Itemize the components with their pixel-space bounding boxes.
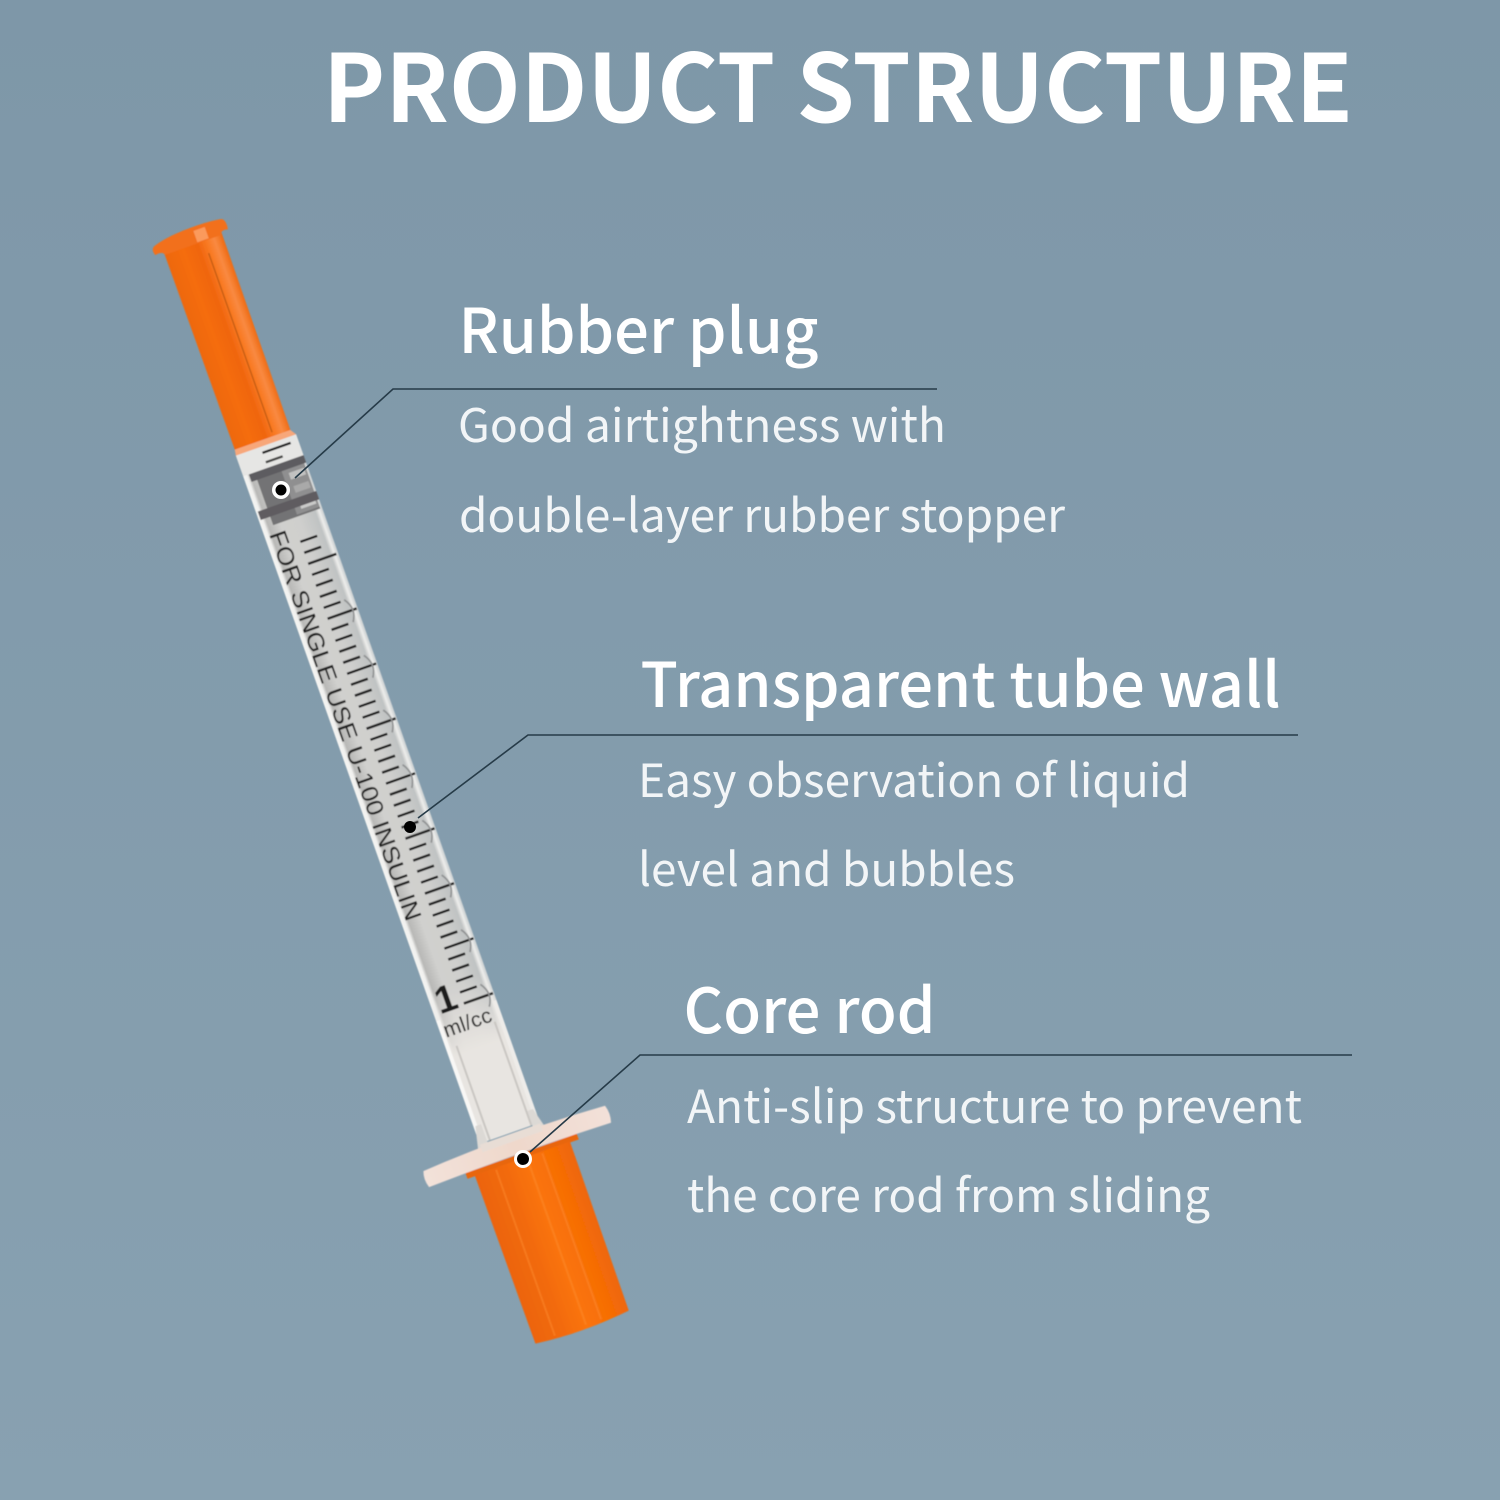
flange [420,1101,612,1188]
barrel text: for single use: FOR SINGLE USE U-100 INSULIN [263,527,426,925]
leader line: tube wall [418,735,1298,818]
callout: rubber plug [458,281,1065,546]
body: rubber plug line 1: Good airtightness with [458,390,946,456]
rubber stopper [239,439,322,529]
marker: rubber plug [272,481,290,499]
body: core rod line 2: the core rod from sliding [687,1160,1210,1226]
leader line: rubber plug [295,389,937,478]
heading: rubber plug: Rubber plug [458,281,818,371]
top orange needle cap [150,216,300,459]
body: rubber plug line 2: double-layer rubber stopper [459,480,1065,546]
bottom orange plunger cap [466,1134,639,1349]
body: tube wall line 2: level and bubbles [638,834,1015,900]
transparent barrel [232,433,546,1153]
barrel text: ml/cc: ml/cc [440,1004,495,1043]
marker: core rod [514,1150,532,1168]
callout: transparent tube wall [638,635,1280,900]
body: tube wall line 1: Easy observation of liquid [638,745,1190,811]
leader line: core rod [530,1055,1352,1152]
barrel text: 1: 1 [429,976,463,1023]
marker: tube wall [404,821,416,833]
body: core rod line 1: Anti-slip structure to prevent [687,1071,1302,1137]
title: PRODUCT STRUCTURE [323,14,1353,150]
heading: transparent tube wall: Transparent tube wall [640,635,1280,725]
syringe illustration [99,195,675,1363]
callout: core rod [684,961,1302,1226]
barrel graduation ticks [300,532,497,1014]
heading: core rod: Core rod [684,961,936,1051]
